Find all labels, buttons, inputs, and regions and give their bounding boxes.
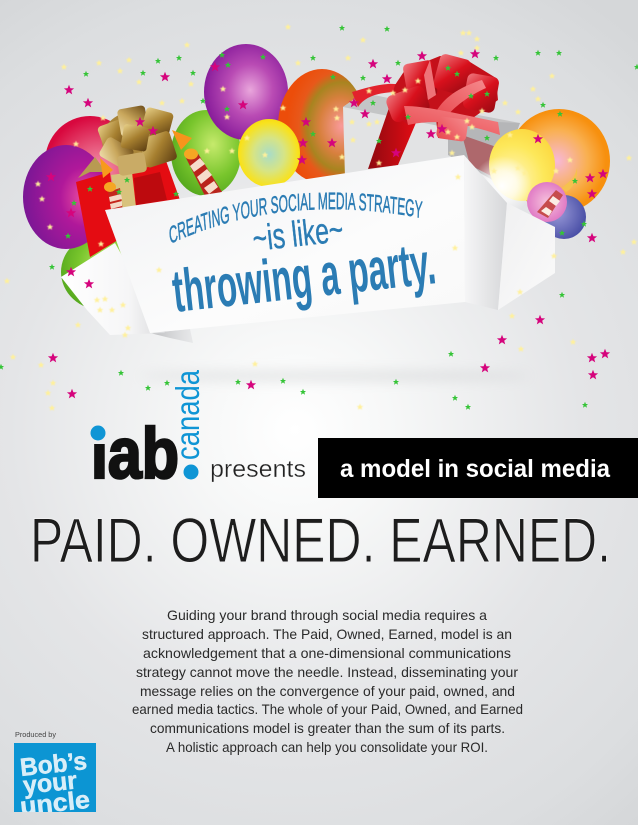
text: produced by: Produced by: [15, 730, 56, 739]
logo: bob's your uncle: [14, 743, 96, 812]
gift: gold bow: [78, 105, 178, 178]
gift: red ribbon strap: [368, 105, 418, 169]
balloon: crimson: [45, 116, 135, 208]
balloon: right orange: [508, 109, 610, 213]
magenta stars: [46, 49, 610, 398]
balloon: blue: [542, 195, 586, 239]
logo word: iab: iab: [91, 415, 179, 494]
body paragraph: A holistic approach can help you consolidate your ROI.: [166, 739, 488, 755]
balloon: top purple: [204, 44, 288, 140]
body paragraph: Guiding your brand through social media requires a: [167, 607, 487, 623]
balloon: lower left green: [61, 234, 143, 310]
panel: box right outer side: [498, 203, 555, 310]
panel: box front: [105, 155, 465, 333]
panel: box right inner side: [464, 155, 507, 310]
yellow stars: [4, 24, 637, 411]
balloon: mid green: [171, 110, 241, 196]
gift: right box body: [343, 93, 520, 182]
text: presents: presents: [210, 456, 306, 483]
body paragraph: message relies on the convergence of your paid, owned, and: [140, 683, 515, 699]
banner: a model in social media: a model in social media: [340, 455, 611, 483]
glow from box: [472, 156, 532, 216]
body paragraph: strategy cannot move the needle. Instead, disseminating your: [136, 664, 518, 680]
body paragraph: communications model is greater than the sum of its parts.: [150, 720, 505, 736]
body paragraph: acknowledgement that a one-dimensional communications: [143, 645, 511, 661]
panel: box left flap: [61, 243, 165, 335]
logo: iab canada: [90, 369, 206, 494]
logo dot: canada: [184, 464, 198, 480]
heading on box: [169, 192, 439, 325]
heading line: is like: ~is like~: [250, 208, 345, 259]
logo word: canada: canada: [169, 369, 206, 460]
balloon: red orange: [278, 69, 366, 183]
balloon: left purple: [23, 145, 109, 249]
body paragraph: structured approach. The Paid, Owned, Earned, model is an: [142, 626, 512, 642]
balloon: right yellow: [489, 129, 555, 201]
heading line: creating your social media strategy: CREATING YOUR SOCIAL MEDIA STRATEGY: [169, 192, 423, 243]
icon: small firework: [100, 158, 123, 214]
green stars: [0, 25, 638, 410]
logo: bob's your uncle: Bob’s: [19, 747, 88, 782]
floor shadow under gift box: [140, 371, 530, 381]
body paragraph: [132, 607, 523, 755]
icon: large firework: [172, 130, 222, 196]
illustration: balloons and gifts: [23, 44, 610, 310]
balloon: pink: [527, 182, 567, 222]
shadow under box front: [150, 329, 193, 343]
logo: bob's your uncle: uncle: [19, 786, 91, 821]
gift: left red box: [76, 158, 180, 257]
banner: a model in social media: [318, 438, 638, 498]
body paragraph: earned media tactics. The whole of your Paid, Owned, and Earned: [132, 701, 523, 717]
logo: bob's your uncle: your: [22, 766, 79, 800]
confetti stars: [0, 24, 638, 411]
logo dot: i: [90, 426, 106, 440]
icon: striped candle: [537, 168, 577, 218]
gift: red bow: [352, 53, 500, 142]
heading line: throwing a party: throwing a party.: [169, 229, 439, 325]
balloon: yellow: [238, 119, 300, 187]
